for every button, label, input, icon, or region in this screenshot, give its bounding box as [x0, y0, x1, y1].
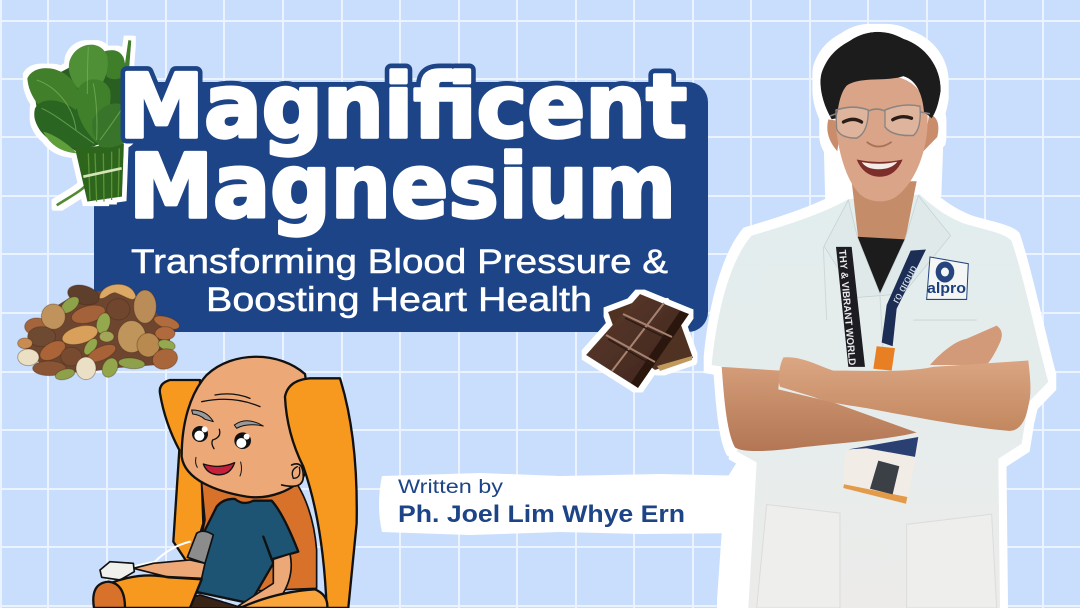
collar: [824, 196, 951, 298]
glasses: [830, 105, 930, 138]
chair inner: [190, 483, 317, 593]
QR code: [870, 461, 899, 494]
pants: [155, 595, 238, 608]
hand fingers: [930, 326, 1002, 365]
smile: [857, 160, 903, 177]
extra white cutout areas: [725, 132, 935, 608]
neck: [852, 181, 917, 241]
armrest: [110, 575, 202, 608]
upper arm and fist: [779, 357, 1030, 431]
hair: [820, 32, 941, 119]
nose: [867, 142, 892, 147]
cushion: [240, 589, 327, 608]
face details: [192, 394, 300, 478]
arm: [238, 554, 291, 608]
icon: mixed nuts: [18, 282, 181, 382]
person: pharmacist in white coat: [712, 32, 1048, 608]
ID card: [843, 437, 920, 504]
cuff: [187, 531, 213, 563]
title line: Magnificent: Magnificent: [119, 55, 687, 158]
chair back: [160, 380, 203, 567]
author strip: [379, 473, 752, 535]
eyes: [843, 117, 912, 122]
monitor: [100, 562, 134, 580]
head: [182, 357, 317, 497]
icon: chocolate bar: [586, 294, 693, 388]
neck: [235, 498, 253, 507]
title: [119, 55, 687, 238]
ears: [827, 114, 938, 152]
left lanyard: [836, 247, 865, 367]
cable: [133, 542, 190, 567]
logo wordmark: alpro: [927, 280, 966, 297]
right lanyard: [882, 250, 926, 346]
subtitle line 1: Transforming Blood Pressure &: [131, 243, 668, 281]
coat folds: [823, 247, 977, 367]
badge logo: [927, 257, 968, 299]
black undershirt: [857, 237, 905, 294]
lanyard text left: THY & VIBRANT WORLD: [836, 249, 857, 366]
character: seated man with blood pressure cuff: [93, 357, 357, 608]
armrest end: [93, 582, 125, 608]
ID card header: [848, 437, 918, 457]
face: [835, 75, 928, 201]
lanyard text right: ro group: [890, 264, 920, 305]
ear: [282, 464, 303, 486]
title line: Magnesium: Magnesium: [129, 135, 676, 238]
author name: Ph. Joel Lim Whye Ern: [398, 501, 685, 528]
forearm: [133, 560, 205, 578]
lanyard clip: [873, 346, 895, 371]
ID card footer: [843, 484, 907, 504]
subtitle line 2: Boosting Heart Health: [206, 281, 592, 319]
coat: [712, 194, 1048, 608]
pockets: [757, 504, 997, 608]
chair wing: [285, 378, 357, 608]
icon: spinach bunch: [27, 40, 133, 205]
lower arm: [722, 367, 917, 451]
shirt: [195, 499, 298, 603]
teeth: [862, 162, 897, 169]
subtitle: [131, 243, 668, 319]
written by label: Written by: [398, 477, 504, 498]
panel: title background: [94, 82, 708, 332]
title line: Magnificent: Magnificent: [119, 55, 687, 158]
